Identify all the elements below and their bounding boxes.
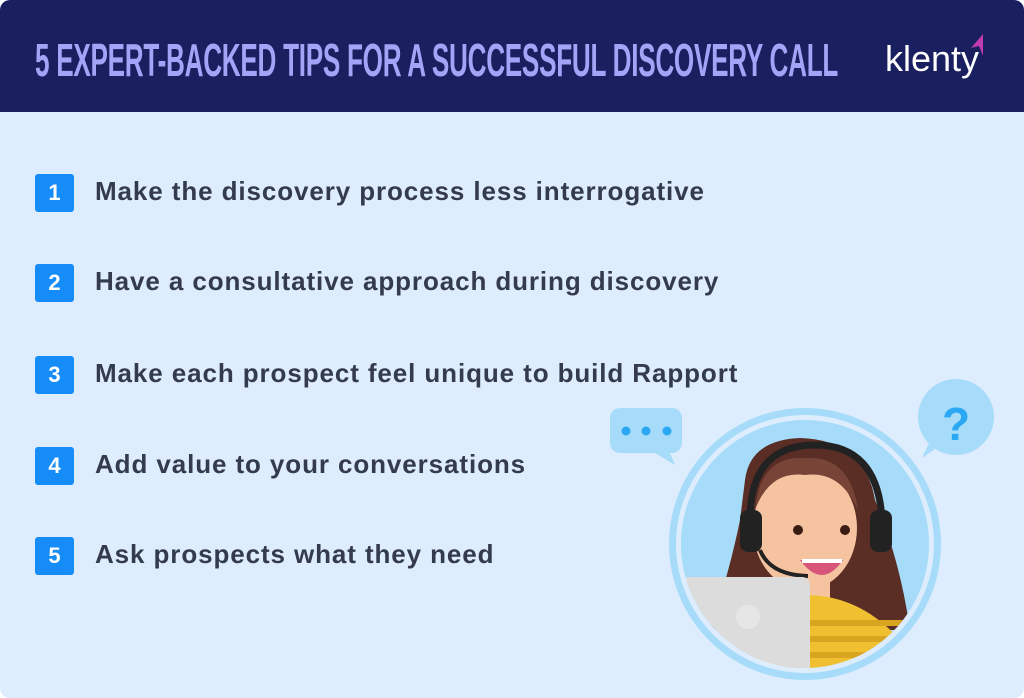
speech bubble: dots — [610, 408, 682, 465]
tip 4 — [35, 447, 526, 485]
tip 3: 3 — [48, 362, 61, 387]
speech bubble: question: ? — [942, 398, 970, 450]
tip 4: 4 — [48, 453, 61, 478]
tip 2: Have a consultative approach during discovery — [95, 266, 719, 296]
tip 5: 5 — [48, 543, 61, 568]
tip 2: 2 — [48, 270, 61, 295]
tip 5: Ask prospects what they need — [95, 539, 494, 569]
header bar — [0, 0, 1024, 112]
illustration: support agent — [610, 379, 994, 680]
tip 3: Make each prospect feel unique to build Rapport — [95, 358, 738, 388]
speech bubble: question — [918, 379, 994, 458]
logo: klenty: klenty — [885, 38, 979, 79]
tip 4: Add value to your conversations — [95, 449, 526, 479]
tip 1: 1 — [48, 180, 61, 205]
tip 1: Make the discovery process less interrogative — [95, 176, 705, 206]
title: 5 EXPERT-BACKED TIPS FOR A SUCCESSFUL DISCOVERY CALL — [35, 34, 838, 86]
tip 5 — [35, 537, 494, 575]
circle frame with person — [669, 408, 941, 698]
